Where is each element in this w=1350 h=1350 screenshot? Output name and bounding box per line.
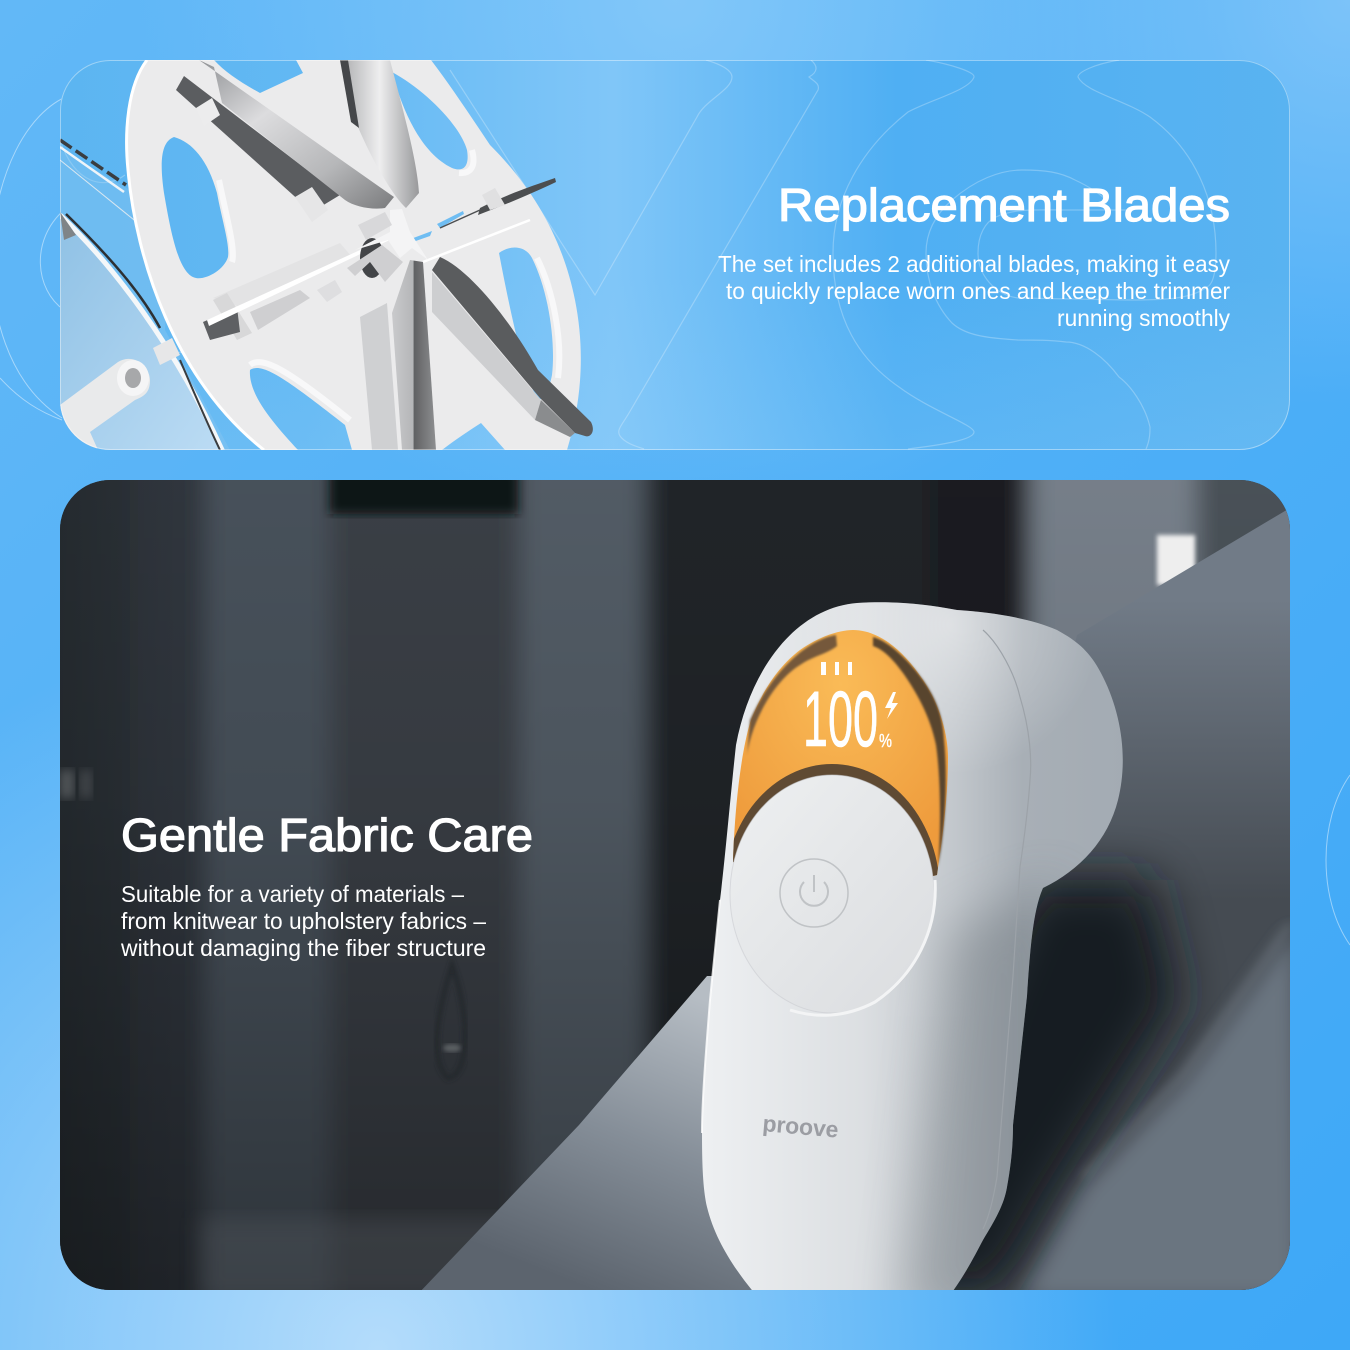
device: lint trimmer <box>702 602 1123 1320</box>
decorative outlined letterforms <box>60 60 1216 449</box>
disc rim shading <box>127 60 264 450</box>
fabric <box>417 505 1300 1300</box>
body text: gentle fabric care: from knitwear to upholstery fabrics – <box>121 908 487 934</box>
percent sign: % <box>879 731 892 751</box>
body text: replacement blades: running smoothly <box>1057 305 1230 331</box>
body text: replacement blades <box>718 251 1230 331</box>
heading: gentle fabric care: Gentle Fabric Care <box>121 809 533 861</box>
battery ticks <box>821 662 852 675</box>
device body <box>702 602 1123 1320</box>
white disc with cut-outs <box>127 60 581 450</box>
panel border <box>60 60 1290 450</box>
button disc <box>730 775 934 1013</box>
hub <box>355 209 428 260</box>
body text: gentle fabric care <box>120 881 487 961</box>
brand logo: proove <box>762 1110 840 1143</box>
image: blade assembly <box>60 60 593 450</box>
blade: lower right <box>432 257 593 437</box>
blade: left thin <box>203 235 403 340</box>
panel: gentle fabric care <box>60 480 1290 1290</box>
blade: bottom vertical <box>360 260 436 450</box>
glass housing <box>60 140 230 450</box>
panel: replacement blades <box>60 60 1290 450</box>
heading: replacement blades: Replacement Blades <box>778 179 1230 231</box>
bolt icon <box>885 692 898 719</box>
disc rim <box>790 880 935 1015</box>
blade: upper left <box>176 60 394 222</box>
blurred room background <box>60 480 1290 1290</box>
power button <box>780 859 848 927</box>
charge readout: 100 <box>803 674 878 763</box>
blade: top <box>340 60 419 208</box>
body text: replacement blades: to quickly replace worn ones and keep the trimmer <box>726 278 1230 304</box>
body text: gentle fabric care: Suitable for a variety of materials – <box>121 881 465 907</box>
bolt tube <box>60 338 180 450</box>
orange display <box>733 630 948 876</box>
blade: right thin <box>408 178 556 262</box>
body text: replacement blades: The set includes 2 additional blades, making it easy <box>718 251 1230 277</box>
body text: gentle fabric care: without damaging the fiber structure <box>120 935 486 961</box>
